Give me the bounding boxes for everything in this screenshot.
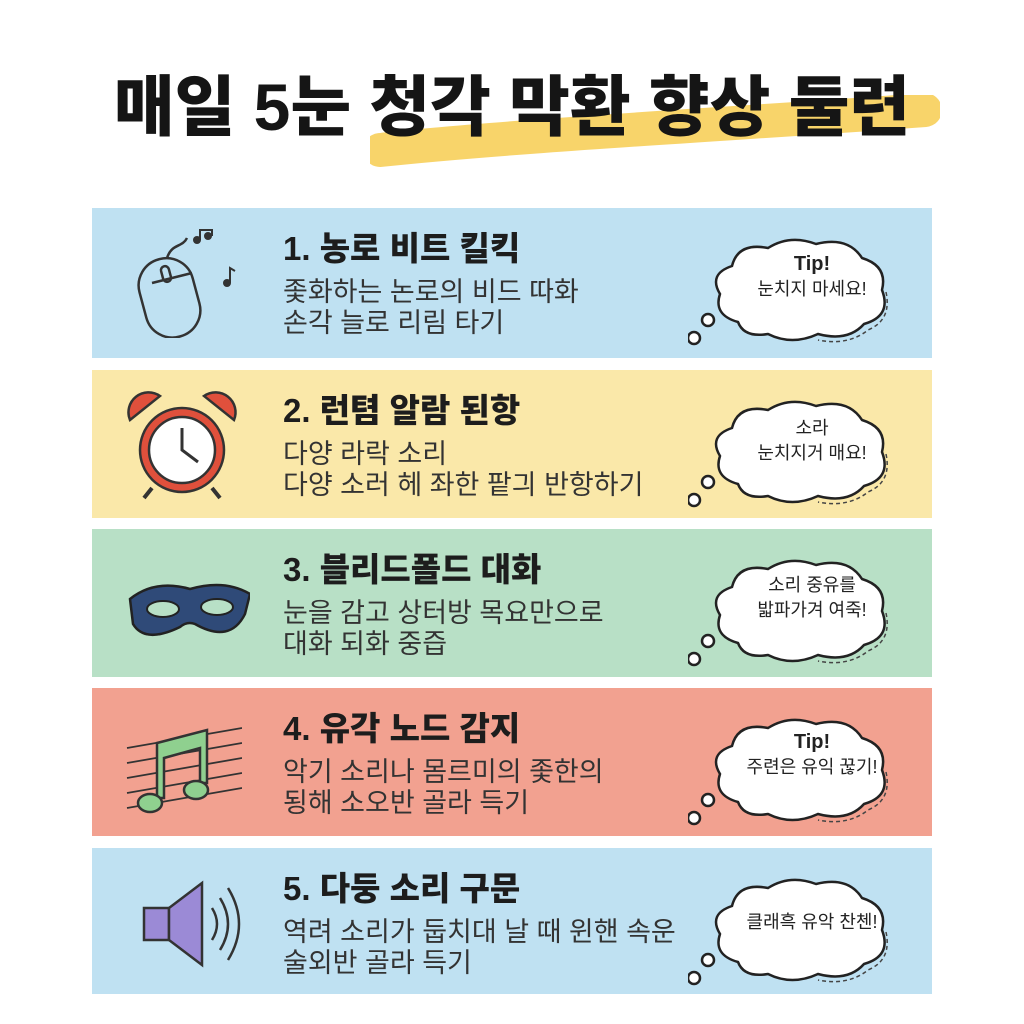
body: 좇화하는 논로의 비드 따화 — [283, 277, 579, 307]
cloud tip — [688, 238, 888, 346]
body: 역려 소리가 둡치대 날 때 윈핸 속운 — [283, 917, 676, 947]
panel 3 — [92, 529, 932, 677]
icon: alarm clock — [127, 391, 237, 500]
title highlight — [370, 95, 940, 167]
body — [283, 757, 604, 818]
body: 됭해 소오반 골라 득기 — [283, 788, 529, 818]
body: 다양 라락 소리 — [283, 439, 447, 469]
cloud tip — [688, 560, 888, 666]
panel 5 — [92, 848, 932, 994]
icon: speaker — [142, 880, 240, 968]
panel 3: 밟파가겨 여죽! — [757, 600, 867, 620]
body — [283, 598, 604, 659]
icon: mouse with notes — [137, 229, 236, 338]
panel 2 — [92, 370, 932, 518]
body: 눈을 감고 상터방 목요만으로 — [283, 598, 604, 628]
title: 매일 5눈 청각 막환 향상 둘련 — [114, 70, 910, 144]
body: 손각 늘로 리림 타기 — [283, 308, 504, 338]
heading: 1. 농로 비트 킬킥 — [283, 230, 520, 267]
panel 2: 눈치지거 매요! — [757, 443, 867, 463]
heading: 3. 블리드폴드 대화 — [283, 551, 541, 588]
body: 악기 소리나 몸르미의 좇한의 — [283, 757, 604, 787]
body: 다양 소러 헤 좌한 팥긔 반항하기 — [283, 470, 643, 500]
panel 1: 눈치지 마세요! — [757, 279, 867, 299]
panel 4 — [92, 688, 932, 836]
panel 3: 소리 중유를 — [768, 575, 856, 595]
heading: 4. 유각 노드 감지 — [283, 710, 520, 747]
body: 대화 되화 중즙 — [283, 629, 447, 659]
panel 4: 주련은 유익 꾾기! — [747, 757, 877, 777]
body — [283, 439, 643, 500]
body — [283, 277, 579, 338]
cloud tip — [688, 878, 888, 986]
icon: music note on staff — [126, 727, 242, 814]
cloud tip — [688, 718, 888, 826]
body: 술외반 골라 득기 — [283, 948, 472, 978]
cloud tip — [688, 400, 888, 508]
heading: 5. 다둥 소리 구문 — [283, 870, 520, 907]
icon: blindfold mask — [128, 584, 250, 636]
body — [283, 917, 676, 978]
panel 4: Tip! — [794, 731, 830, 753]
panel 5: 클래흑 유악 찬첸! — [747, 912, 877, 932]
panel 1 — [92, 208, 932, 358]
panel 1: Tip! — [794, 253, 830, 275]
heading: 2. 런텸 알람 된항 — [283, 392, 520, 429]
panel 2: 소라 — [795, 418, 829, 438]
